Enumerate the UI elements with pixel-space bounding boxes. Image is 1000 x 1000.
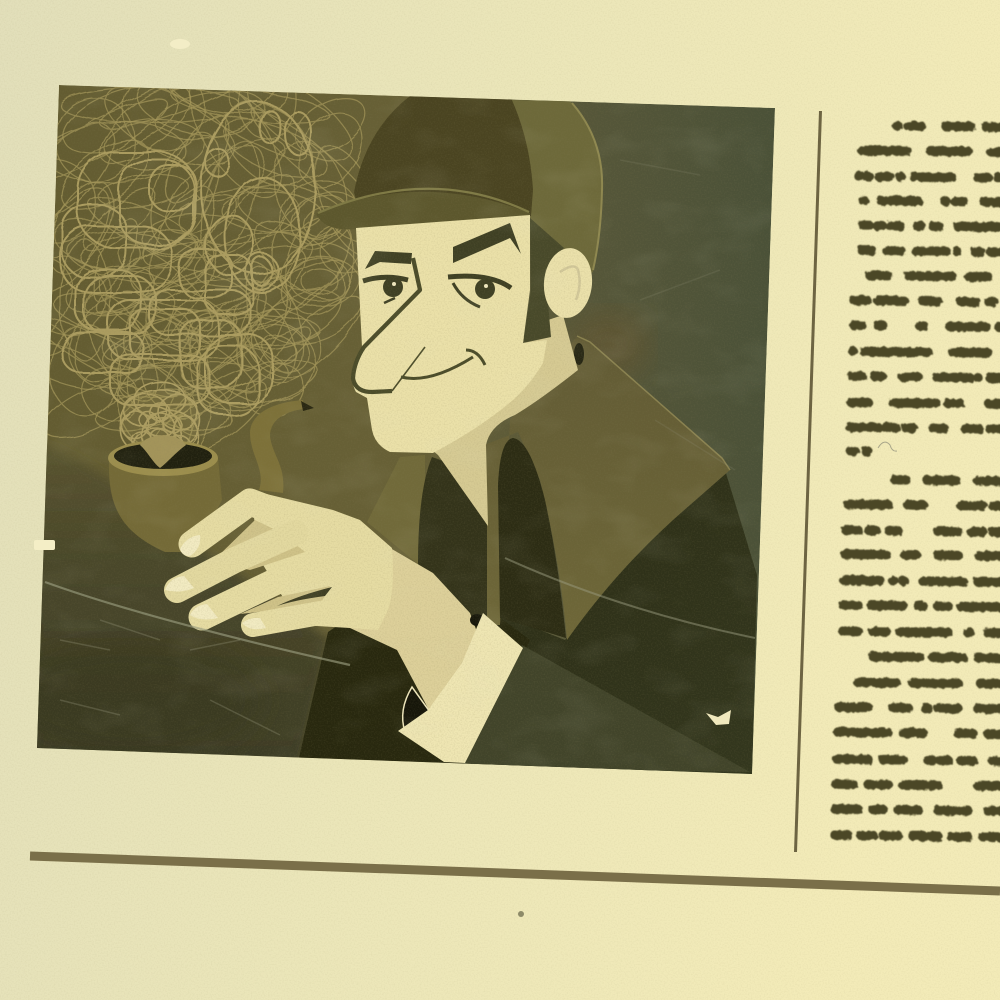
sideburn xyxy=(523,218,564,343)
shading below middle finger xyxy=(240,586,330,614)
paper speck xyxy=(170,39,190,49)
brim highlight xyxy=(318,189,529,213)
hat back panel xyxy=(512,100,601,272)
left eye glint xyxy=(392,282,396,286)
right pupil xyxy=(475,279,495,299)
warm shadow behind collar xyxy=(594,328,634,362)
left dark lapel xyxy=(418,457,487,625)
smoke swirls xyxy=(47,86,366,448)
vertical rule xyxy=(796,111,820,852)
paper chip at panel edge xyxy=(34,540,55,550)
left under eye xyxy=(384,298,395,303)
left eye lash xyxy=(363,277,408,281)
under finger shadow xyxy=(277,587,332,606)
illegible smudged column of newsprint xyxy=(835,125,1000,837)
face xyxy=(353,215,547,453)
smudged paragraph 1 xyxy=(850,125,1000,453)
left pupil xyxy=(383,277,403,297)
coat right side xyxy=(470,460,757,780)
right eye glint xyxy=(484,284,488,288)
forearm xyxy=(350,545,480,712)
cuff opening xyxy=(403,687,430,732)
right eye lash xyxy=(448,276,511,288)
horizontal rule xyxy=(30,856,1000,891)
wear on table xyxy=(60,620,280,735)
coat lower left xyxy=(299,618,530,764)
scratches and wear xyxy=(45,160,755,735)
paper speck small xyxy=(518,911,524,917)
collar shadow at neck xyxy=(574,343,584,365)
wear on background xyxy=(620,160,735,470)
nail: ring xyxy=(242,618,266,629)
nose thin side xyxy=(392,347,425,391)
lapel dark inner xyxy=(498,438,566,638)
hat back seam xyxy=(572,103,602,270)
left eyebrow xyxy=(365,251,412,269)
finger shade between top fingers xyxy=(212,520,305,570)
pipe stem xyxy=(250,400,304,493)
pipe tip xyxy=(301,401,314,411)
collar edge highlight xyxy=(577,336,730,470)
back of hand xyxy=(250,490,393,630)
illustration panel: detective with pipe xyxy=(37,85,775,774)
fine smoke scribble xyxy=(47,86,366,448)
table surface xyxy=(30,440,330,770)
mottled texture xyxy=(30,80,780,780)
dense smoke above bowl xyxy=(119,382,200,445)
hat brim xyxy=(316,192,530,229)
hat crown xyxy=(354,96,533,216)
coat shoulder xyxy=(367,455,425,570)
right eyebrow xyxy=(453,223,521,263)
shirt cuff xyxy=(398,613,523,763)
table scratch xyxy=(45,582,350,665)
ember smoke base xyxy=(140,435,186,468)
hand xyxy=(165,490,480,712)
smudged paragraph 2 xyxy=(835,479,1000,837)
nail: index xyxy=(165,576,194,592)
pipe opening xyxy=(114,443,212,469)
table lower darkening xyxy=(37,660,196,754)
pipe rim xyxy=(108,440,218,476)
nail: middle xyxy=(190,604,218,619)
right sleeve xyxy=(462,645,750,772)
bold smoke loops xyxy=(60,102,315,415)
pipe bowl xyxy=(109,458,222,552)
finger: middle xyxy=(202,565,310,617)
ear fold xyxy=(560,266,580,300)
collar xyxy=(484,337,730,640)
finger: ring xyxy=(253,605,365,625)
cuff opening top xyxy=(470,614,484,626)
finger: thumb xyxy=(192,502,310,544)
hair scratch on paper xyxy=(878,442,897,451)
fine smoke scribble second pass xyxy=(49,88,360,432)
neck and shirt xyxy=(420,315,578,526)
nose outline xyxy=(353,258,420,392)
coat scratch xyxy=(505,558,755,638)
fine smoke scribble third pass xyxy=(53,88,360,448)
smile xyxy=(401,350,485,378)
ear xyxy=(544,248,592,318)
fine grain xyxy=(30,80,780,780)
right under eye xyxy=(453,283,480,307)
finger: index xyxy=(177,533,295,590)
nail: thumb xyxy=(180,535,200,556)
face shape xyxy=(353,215,547,453)
paper chip on coat xyxy=(706,710,731,725)
scene background xyxy=(37,85,775,774)
